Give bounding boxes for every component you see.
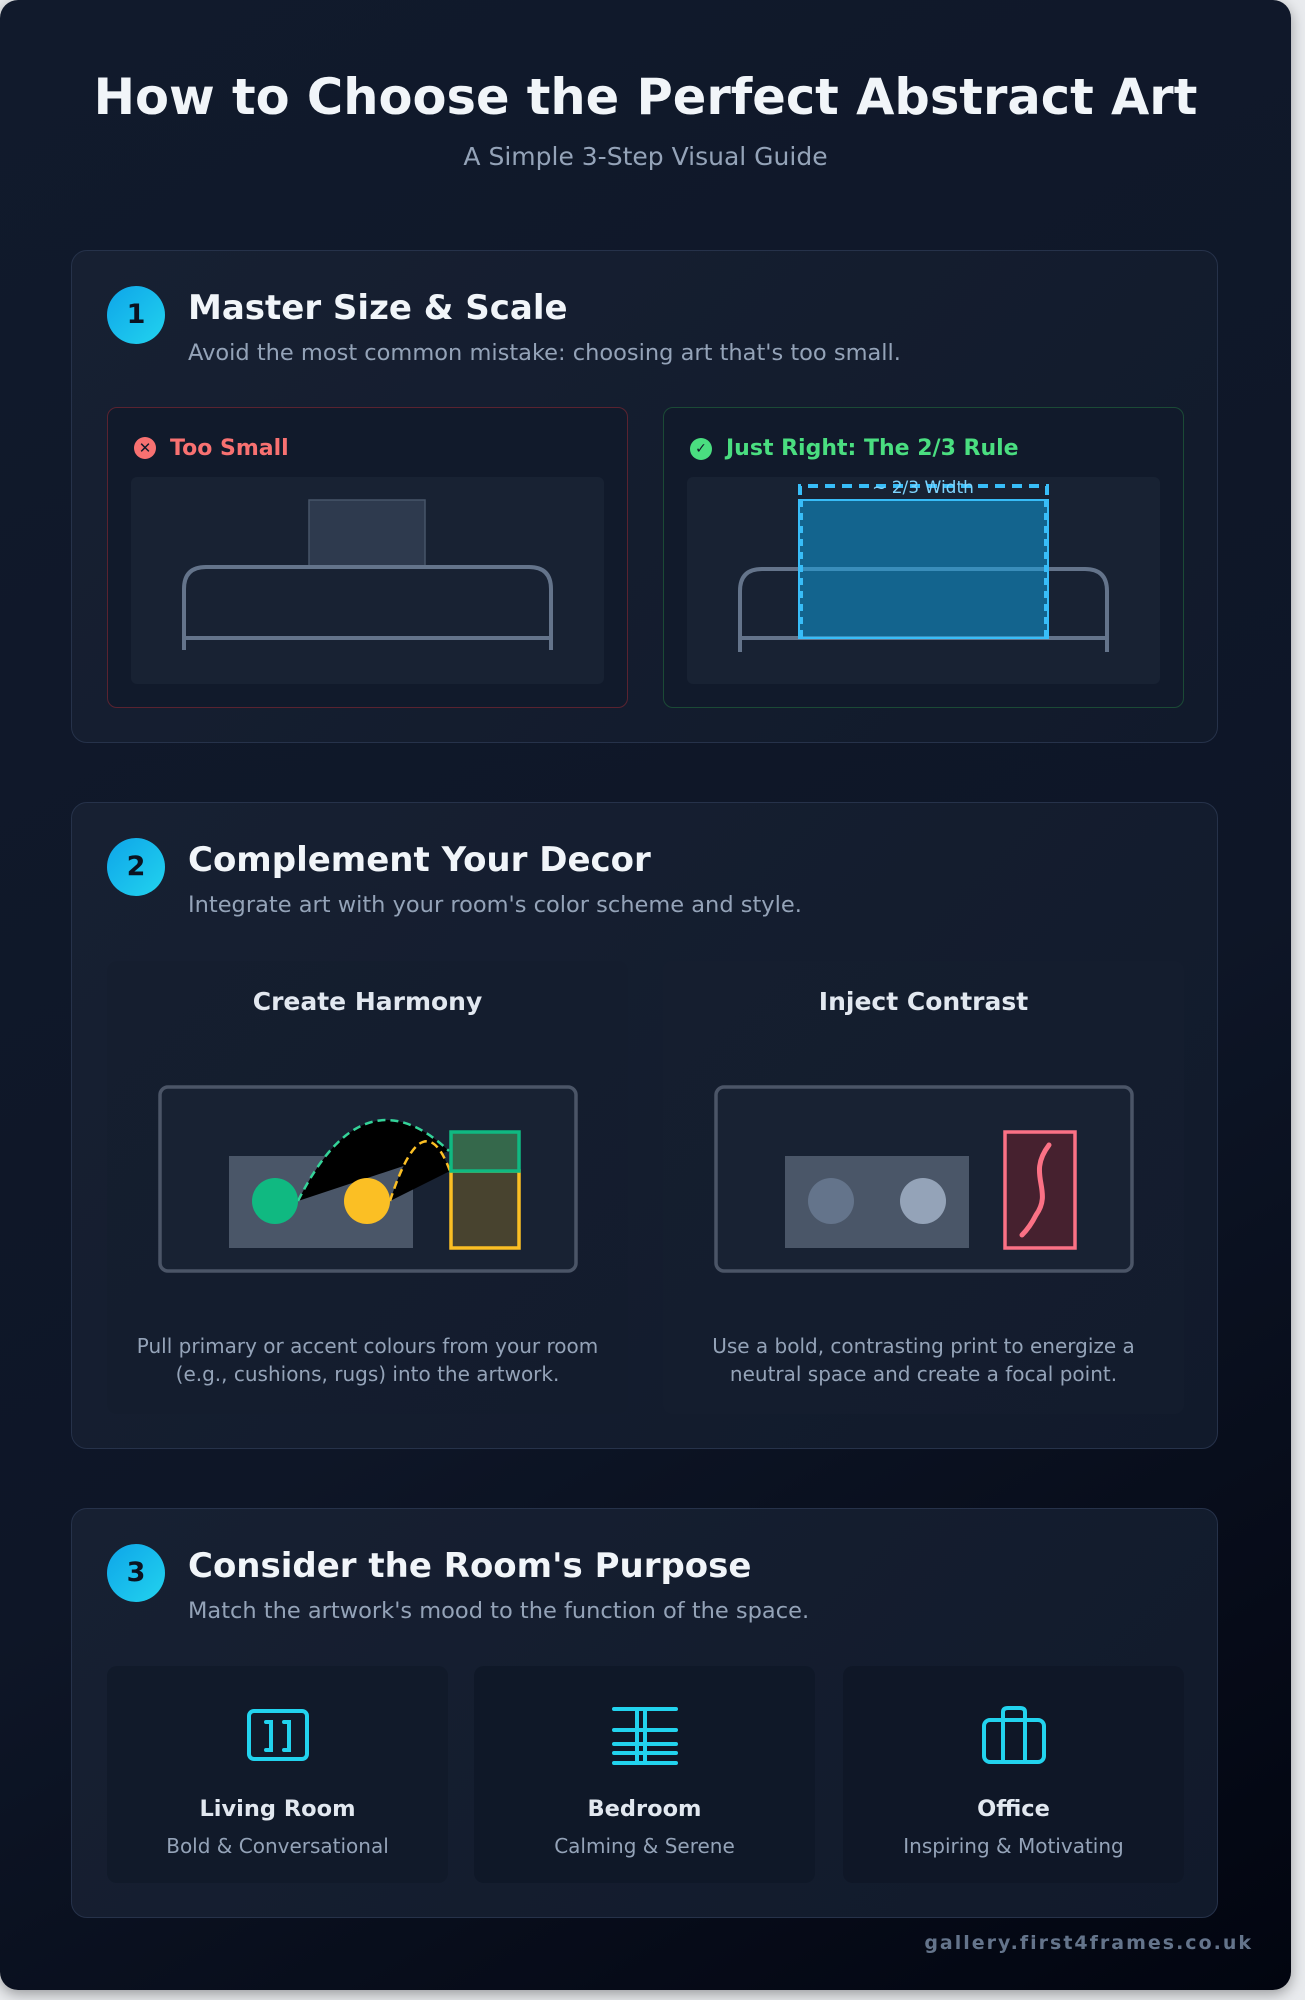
badge 1 (107, 286, 165, 344)
caption: office: Inspiring & Motivating (903, 1834, 1124, 1858)
description: harmony: Pull primary or accent colours from your room (137, 1334, 598, 1358)
caption: living room: Bold & Conversational (166, 1834, 389, 1858)
label: bedroom: Bedroom (588, 1796, 701, 1822)
badge 1: 1 (127, 299, 145, 330)
illustration: small art over sofa (182, 499, 553, 650)
heading: inject contrast: Inject Contrast (819, 987, 1028, 1016)
label: just right: Just Right: The 2/3 Rule (726, 436, 1019, 461)
label: too small: Too Small (170, 436, 289, 461)
subtitle 2: Integrate art with your room's color scheme and style. (188, 892, 802, 918)
icon: bedroom (612, 1707, 678, 1765)
panel: step 3 room purpose (71, 1508, 1218, 1918)
subtitle: A Simple 3-Step Visual Guide (463, 142, 828, 171)
description: contrast: Use a bold, contrasting print to energize a (712, 1334, 1135, 1358)
description: harmony (137, 1334, 598, 1386)
description: contrast: neutral space and create a focal point. (730, 1362, 1117, 1386)
subtitle 3: Match the artwork's mood to the function of the space. (188, 1598, 809, 1624)
panel: too small (107, 407, 628, 708)
badge 3 (107, 1544, 165, 1602)
illustration: 2/3 art over sofa: ~ 2/3 Width (872, 478, 974, 498)
illustration: harmony (158, 1085, 578, 1273)
heading 2: Complement Your Decor (188, 840, 651, 880)
item: bedroom (474, 1666, 815, 1883)
description: harmony: (e.g., cushions, rugs) into the artwork. (176, 1362, 559, 1386)
icon: living room (247, 1709, 309, 1761)
description: contrast (712, 1334, 1135, 1386)
footer url: gallery.first4frames.co.uk (924, 1932, 1253, 1954)
panel: step 1 size & scale (71, 250, 1218, 743)
panel: just right (663, 407, 1184, 708)
heading: create harmony: Create Harmony (253, 987, 482, 1016)
panel: step 2 complement decor (71, 802, 1218, 1449)
title: How to Choose the Perfect Abstract Art (94, 68, 1197, 126)
item: living room (107, 1666, 448, 1883)
illustration: contrast (714, 1085, 1134, 1273)
icon: office (982, 1706, 1046, 1764)
label: too small: ✕ (139, 439, 151, 457)
heading 3: Consider the Room's Purpose (188, 1546, 751, 1586)
badge 2 (107, 838, 165, 896)
column: create harmony (107, 961, 628, 1414)
item: office (843, 1666, 1184, 1883)
badge 3: 3 (127, 1557, 145, 1588)
label: living room: Living Room (199, 1796, 356, 1822)
label: office: Office (977, 1796, 1050, 1822)
heading 1: Master Size & Scale (188, 288, 568, 328)
caption: bedroom: Calming & Serene (554, 1834, 735, 1858)
illustration: 2/3 art over sofa (738, 478, 1109, 652)
subtitle 1: Avoid the most common mistake: choosing art that's too small. (188, 340, 901, 366)
column: inject contrast (663, 961, 1184, 1414)
badge 2: 2 (127, 851, 145, 882)
label: just right: ✓ (695, 441, 707, 457)
